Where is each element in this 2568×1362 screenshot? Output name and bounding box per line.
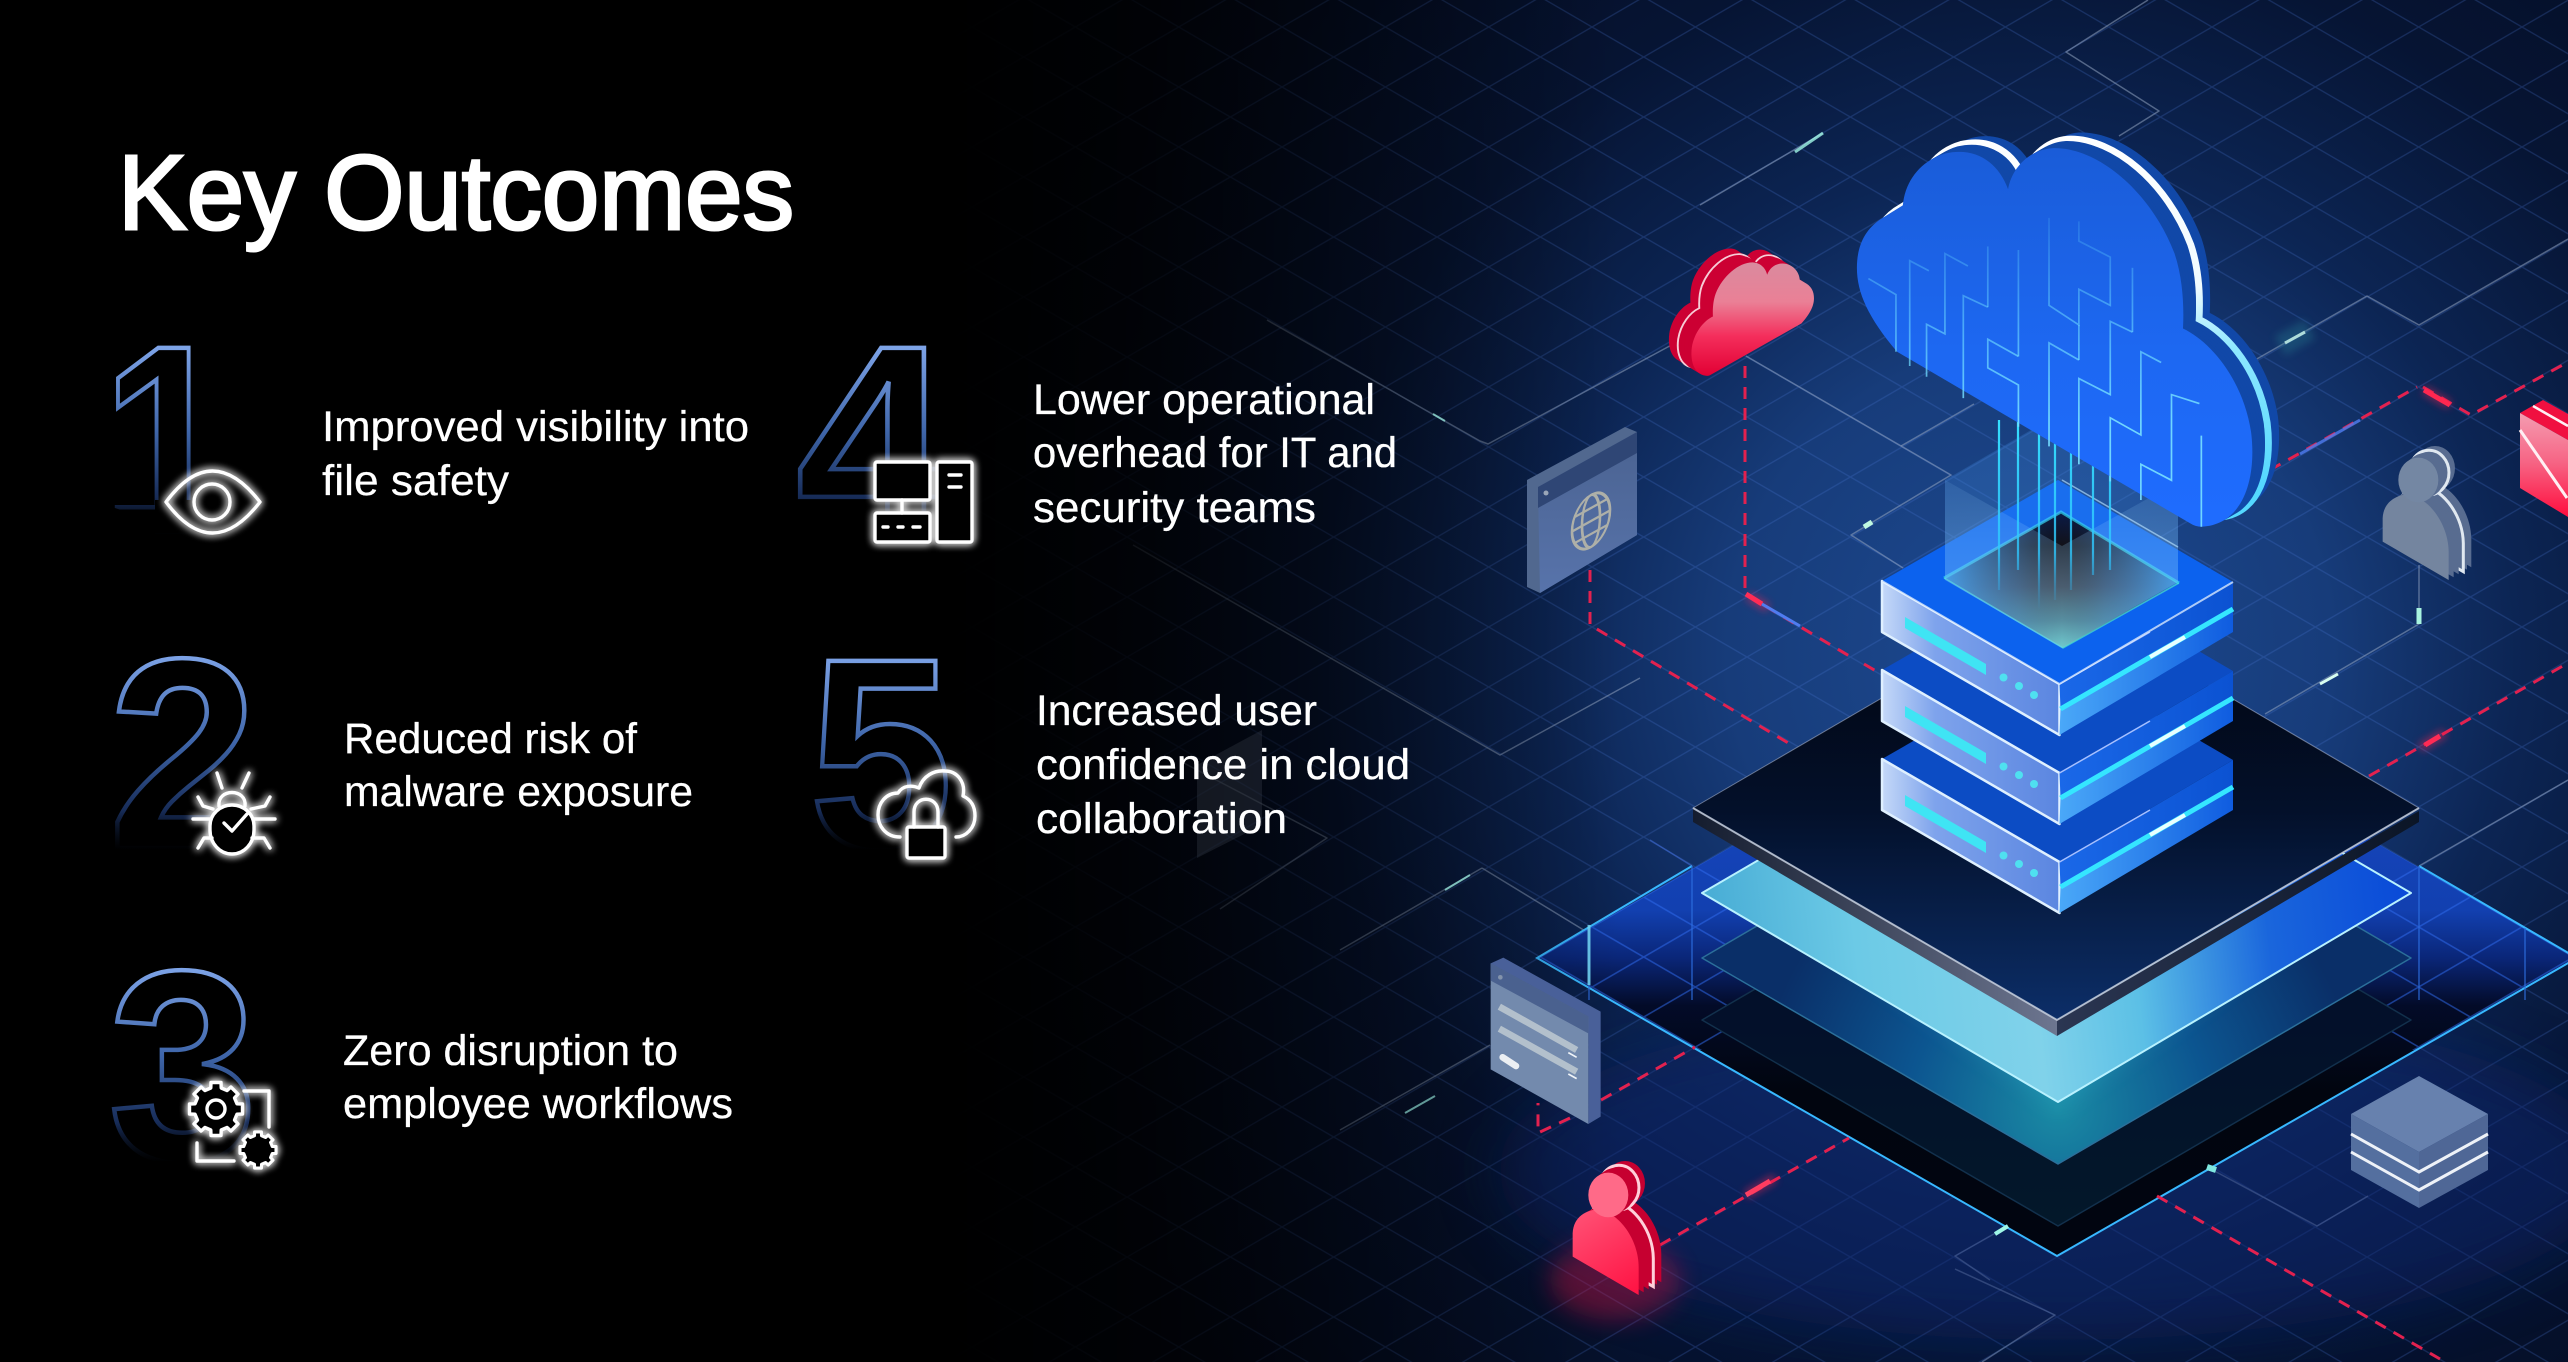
text: outcome 1 bbox=[322, 403, 749, 505]
text: outcome 5 bbox=[1036, 687, 1410, 843]
circuit lines bbox=[1133, 0, 2568, 1362]
data beams bbox=[1999, 420, 2110, 625]
blue haze under platform bbox=[1497, 1000, 2568, 1340]
globe bbox=[1572, 484, 1610, 558]
outcome 3 bbox=[108, 914, 733, 1218]
plate: dark bottom bbox=[1702, 813, 2411, 1226]
plate: teal middle bbox=[1702, 751, 2411, 1164]
server unit middle bbox=[1882, 569, 2233, 824]
number 4: 4 bbox=[796, 289, 953, 593]
data glints bbox=[1405, 133, 2450, 1234]
text: outcome 4: Lower operational bbox=[1033, 376, 1375, 424]
icon: computer bbox=[875, 462, 972, 542]
text: outcome 4: security teams bbox=[1033, 484, 1316, 532]
main cloud bbox=[1857, 132, 2279, 527]
layered plates bbox=[1702, 686, 2411, 1226]
text: outcome 2: malware exposure bbox=[344, 768, 693, 816]
text: outcome 4: overhead for IT and bbox=[1033, 429, 1397, 477]
left fade to black bbox=[900, 0, 1630, 1362]
server stack bbox=[1882, 412, 2233, 913]
icon: bug bbox=[193, 773, 275, 854]
icon: eye bbox=[166, 471, 260, 533]
text: outcome 3: employee workflows bbox=[343, 1080, 733, 1128]
text: outcome 3 bbox=[343, 1027, 733, 1128]
number 2: 2 bbox=[108, 602, 258, 906]
text: outcome 2 bbox=[344, 715, 693, 816]
number 5: 5 bbox=[809, 602, 953, 906]
outcome 5 bbox=[809, 602, 1410, 906]
glass chamber bbox=[1944, 412, 2179, 648]
icon: globe window bbox=[1527, 427, 1637, 593]
base diamond bbox=[1535, 838, 2568, 1257]
icon: grey person bbox=[2383, 446, 2471, 580]
icon: red person bbox=[1573, 1161, 1661, 1295]
server unit top bbox=[1882, 480, 2233, 735]
icon: layered stack bbox=[2351, 1076, 2488, 1208]
red person glow bbox=[1550, 1240, 1680, 1320]
outcome 2 bbox=[108, 602, 693, 906]
icon: red cloud bbox=[1669, 249, 1814, 376]
outcome 1 bbox=[102, 289, 749, 593]
icon: red box bbox=[2520, 400, 2568, 517]
server unit bottom bbox=[1882, 658, 2233, 913]
black platform bbox=[1693, 596, 2419, 1036]
cloud circuit lines bbox=[1868, 218, 2201, 527]
text: outcome 2: Reduced risk of bbox=[344, 715, 638, 763]
ghost panel behind text bbox=[1197, 730, 1262, 858]
text: outcome 3: Zero disruption to bbox=[343, 1027, 678, 1075]
text: outcome 5: collaboration bbox=[1036, 795, 1287, 843]
dashed red connectors bbox=[1538, 362, 2568, 1359]
text: outcome 4 bbox=[1033, 376, 1397, 532]
icon: login window bbox=[1491, 958, 1601, 1124]
number 3: 3 bbox=[108, 914, 258, 1218]
text: outcome 5: confidence in cloud bbox=[1036, 741, 1410, 789]
text: outcome 5: Increased user bbox=[1036, 687, 1317, 735]
icon: cloud lock bbox=[878, 771, 975, 858]
plate glow bbox=[1800, 770, 2314, 1105]
title: Key Outcomes bbox=[118, 134, 794, 252]
icon: gears bbox=[190, 1082, 276, 1168]
text: outcome 1: Improved visibility into bbox=[322, 403, 749, 451]
outcome 4 bbox=[796, 289, 1397, 593]
number 1: 1 bbox=[102, 289, 232, 593]
text: outcome 1: file safety bbox=[322, 457, 510, 505]
plate: light cyan top bbox=[1702, 686, 2411, 1102]
